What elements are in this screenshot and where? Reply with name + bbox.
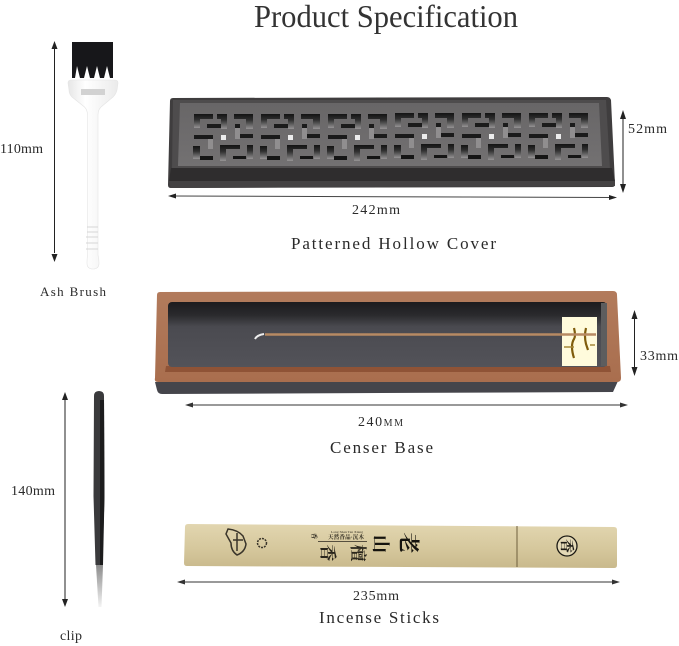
arrow: brush height [52,41,58,262]
box small print: Long Shan Tan Xiang [331,530,363,534]
box title: 山 [371,535,391,553]
label: 240mm: 240MM [358,415,403,430]
arrow: base width [185,402,628,408]
label: 52mm: 52mm [628,122,667,137]
arrow: clip height [62,392,68,607]
box title: 檀 [348,544,367,562]
icon: incense stick box [184,524,617,568]
icon: tweezers clip [94,391,104,607]
icon: ash brush [68,42,118,269]
arrow: cover depth [620,110,626,193]
label: patterned hollow cover: Patterned Hollow Cover [291,234,496,253]
label: ash brush: Ash Brush [40,284,106,299]
icon: patterned hollow cover [168,97,615,188]
label: 140mm: 140mm [11,484,55,499]
box title: 香 [318,544,337,562]
label: 33mm: 33mm [640,349,678,364]
icon: censer base [155,291,621,394]
arrow: base depth [632,310,638,376]
box title [318,532,421,562]
box small print: 天然香品·沉木 [328,533,364,541]
arrow: sticks width [177,580,620,584]
label: 235mm: 235mm [353,589,399,604]
incense stick [255,334,596,339]
box emblem [226,529,266,555]
box title: 老 [397,532,421,554]
arrow: cover width [168,194,617,200]
label: censer base: Censer Base [330,438,433,457]
box seal: 香 [558,539,575,553]
gold card [562,317,597,366]
label: clip: clip [60,629,82,644]
label: 242mm: 242mm [352,203,400,218]
label: incense sticks: Incense Sticks [319,608,439,627]
box seal [557,536,577,556]
box small print: 香 [310,533,318,539]
box small print [310,530,367,542]
label: 110mm: 110mm [0,142,43,157]
lattice pattern [193,113,588,161]
